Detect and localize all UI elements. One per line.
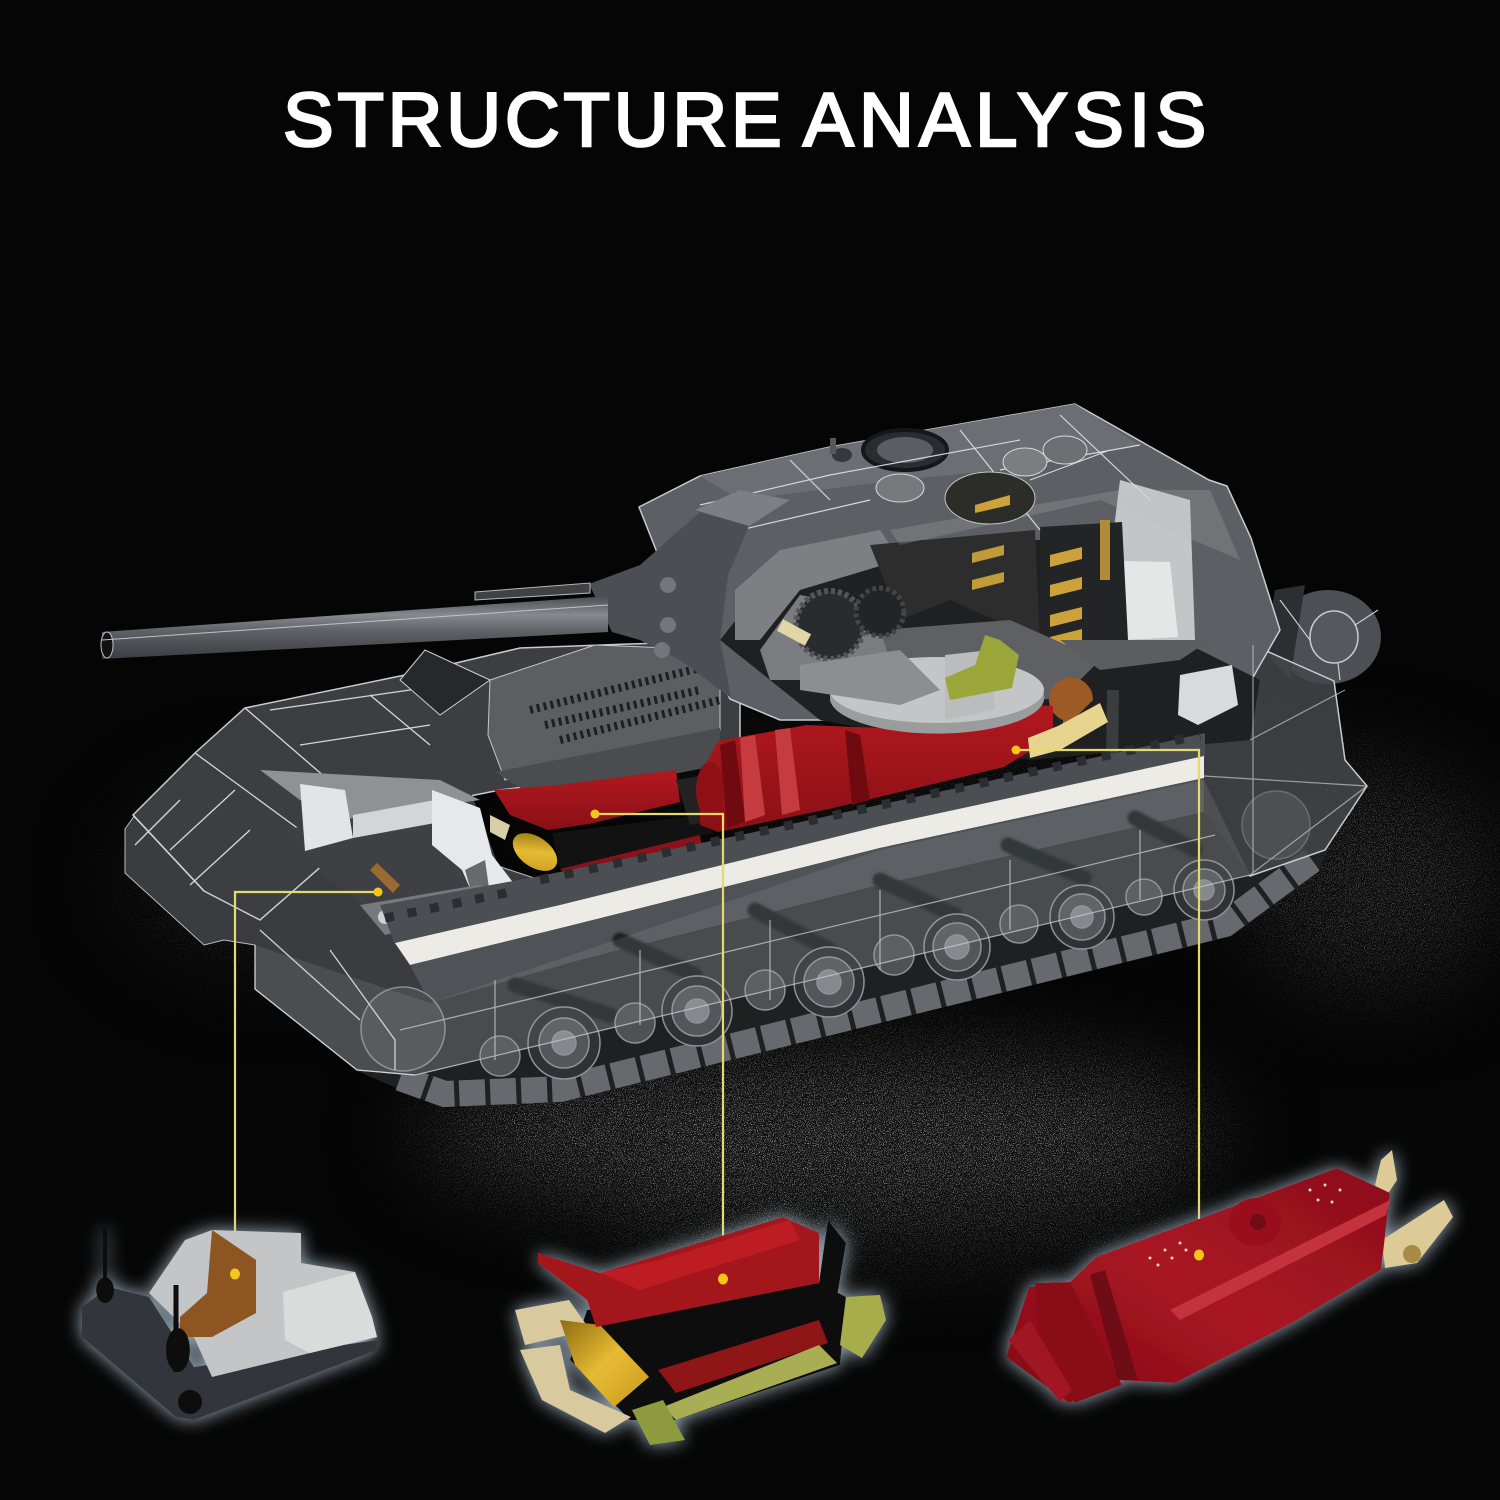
front lower plate [125, 800, 600, 1075]
part: driver seat [82, 1228, 377, 1420]
callout lines [235, 750, 1199, 1279]
ground speckle [92, 706, 1500, 1316]
road wheels [361, 791, 1310, 1079]
turret top plates [700, 404, 1240, 560]
gun mantlet [589, 490, 790, 698]
hull top deck [133, 640, 740, 920]
white stripe [395, 756, 1204, 965]
transparent side skirt [255, 780, 1250, 1075]
title: STRUCTURE [283, 78, 785, 163]
turret ring [800, 650, 1044, 734]
rear drum [1265, 585, 1381, 684]
main red cylinder [696, 705, 1053, 832]
olive seat [945, 635, 1019, 700]
ammo pipe [1028, 703, 1108, 758]
rear hull [1150, 640, 1367, 876]
lower hull band [410, 778, 1204, 1003]
tank [101, 404, 1381, 1107]
gun barrel [101, 583, 608, 659]
track band [355, 845, 1330, 1107]
suspension arms [515, 818, 1195, 1015]
front red gearbox [490, 770, 715, 882]
turret interior [720, 480, 1260, 770]
upper stud ledge [380, 733, 1205, 945]
suspension bay [400, 812, 1250, 1075]
transparent turret shell [639, 404, 1280, 720]
callout dots [230, 746, 1204, 1284]
part: red cylinder [1006, 1150, 1453, 1403]
cabin interior [260, 770, 520, 935]
title: ANALYSIS [803, 78, 1211, 163]
part: transmission [515, 1217, 886, 1445]
rear skirt detail [1204, 645, 1367, 875]
